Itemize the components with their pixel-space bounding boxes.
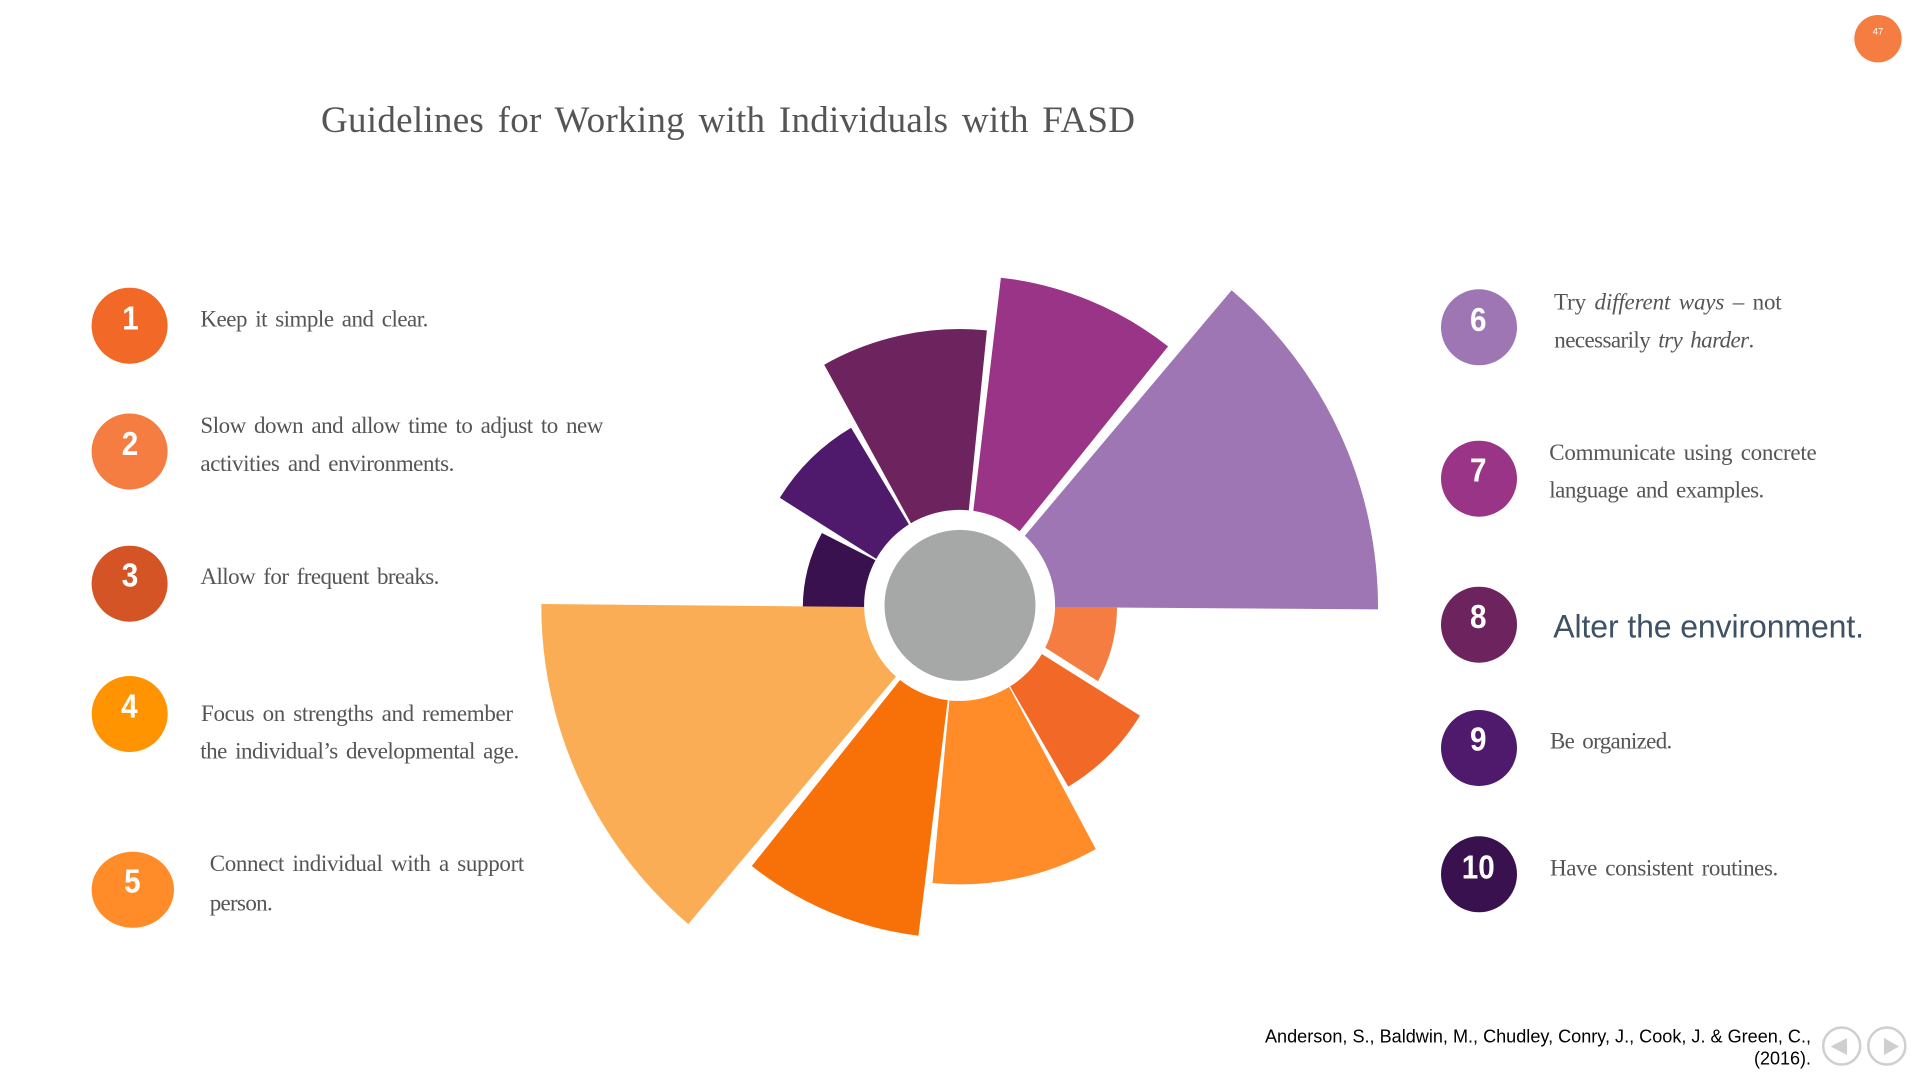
guideline 6: necessarily try harder.	[1554, 327, 1754, 352]
wedge 9	[780, 428, 911, 561]
wedge 3	[541, 604, 899, 924]
guideline 1: Keep it simple and clear.	[200, 307, 428, 332]
guideline 8: Alter the environment.	[1553, 609, 1864, 645]
guideline 4: 4	[121, 687, 138, 724]
citation	[1265, 1027, 1811, 1068]
guideline 3	[92, 546, 439, 622]
guideline 5: Connect individual with a support	[210, 851, 525, 876]
center hub	[864, 510, 1055, 701]
guideline 5: person.	[210, 891, 273, 916]
icon: next button	[1868, 1028, 1905, 1064]
wedge 1	[1007, 651, 1140, 787]
guideline 7: language and examples.	[1549, 478, 1764, 503]
title: Guidelines for Working with Individuals with FASD	[321, 100, 1135, 141]
guideline 6: 6	[1470, 301, 1487, 338]
guideline 3: 3	[122, 557, 138, 594]
guideline 8	[1441, 587, 1864, 663]
guideline 9: 9	[1470, 721, 1487, 758]
page number badge: 47	[1873, 26, 1883, 37]
wedge 6	[1020, 290, 1378, 609]
guideline 7: Communicate using concrete	[1549, 440, 1817, 465]
guideline 9	[1441, 710, 1672, 786]
guideline 6	[1441, 289, 1782, 365]
citation: (2016).	[1754, 1048, 1811, 1068]
wedge 5	[932, 681, 1096, 884]
guideline 2: 2	[122, 425, 138, 462]
wedge 2	[1038, 607, 1117, 681]
wedge 4	[752, 675, 948, 936]
guideline 9: Be organized.	[1550, 728, 1672, 753]
guideline 4: Focus on strengths and remember	[201, 701, 513, 726]
guideline 2	[92, 413, 604, 490]
guideline 4	[92, 676, 519, 764]
guideline 10: 10	[1462, 848, 1495, 885]
wedge 10	[803, 533, 877, 608]
guideline 5	[92, 851, 525, 928]
page number badge	[1854, 15, 1902, 62]
guideline 3: Allow for frequent breaks.	[200, 564, 439, 589]
wedge 8	[824, 329, 987, 527]
guideline 7	[1441, 440, 1817, 517]
guideline 1	[92, 288, 428, 364]
guideline 2: Slow down and allow time to adjust to new	[200, 413, 604, 438]
guideline 1: 1	[122, 300, 139, 336]
guideline 5: 5	[124, 863, 141, 900]
polar wedge chart	[541, 278, 1378, 936]
guideline 8: 8	[1470, 598, 1487, 635]
guideline 4: the individual’s developmental age.	[200, 739, 519, 764]
wedge 7	[973, 278, 1168, 537]
guideline 2: activities and environments.	[200, 451, 454, 476]
guideline 7: 7	[1470, 452, 1487, 489]
icon: previous button	[1823, 1028, 1860, 1064]
guideline 10: Have consistent routines.	[1550, 855, 1778, 880]
guideline 6: Try different ways – not	[1554, 289, 1782, 314]
guideline 10	[1441, 836, 1778, 912]
citation: Anderson, S., Baldwin, M., Chudley, Conry, J., Cook, J. & Green, C.,	[1265, 1027, 1811, 1047]
